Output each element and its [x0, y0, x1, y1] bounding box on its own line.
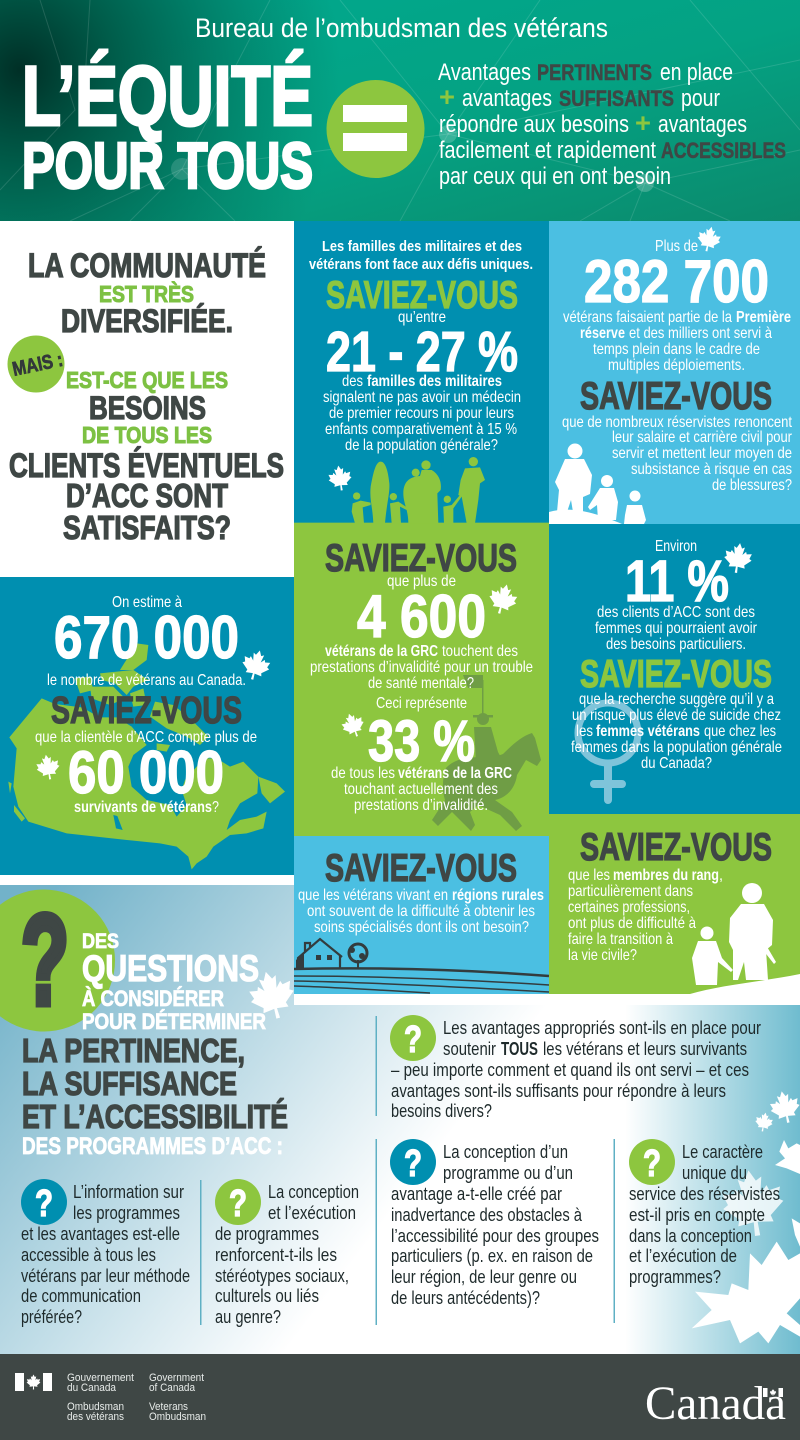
question: reservist service: et l’exécution de	[629, 1246, 737, 1266]
heading: questions to consider: QUESTIONS	[82, 948, 259, 989]
text: no family doctor: de la population générale?	[345, 437, 498, 454]
question: reservist service: unique du	[682, 1163, 747, 1183]
icon: equals sign	[326, 80, 424, 178]
heading: saviez-vous: SAVIEZ-VOUS	[326, 274, 518, 317]
text: estimated veterans: On estime à	[112, 594, 182, 611]
question circle: ?	[21, 889, 69, 1032]
government signature: Ombudsman	[149, 1411, 206, 1423]
text: all RCMP veterans: prestations d’invalidité.	[354, 797, 488, 814]
text: civilian transition: faire la transition à	[568, 931, 673, 948]
text: civilian transition: certaines professions,	[568, 899, 690, 916]
text: specialized care: ont souvent de la difficulté à obtenir les	[307, 903, 535, 920]
text: civilian transition: ont plus de difficulté à	[568, 915, 696, 932]
question: appropriate benefits: avantages sont-ils suffisants pour répondre à leurs	[391, 1081, 726, 1101]
heading: needs question: EST-CE QUE LES	[66, 367, 228, 393]
text: civilian transition: membres du rang	[613, 867, 719, 884]
equity definition: avantages	[462, 85, 552, 112]
text: estimated veterans: 670 000	[54, 604, 239, 671]
question: information: vétérans par leur méthode	[21, 1266, 190, 1286]
text: specialized care: que les vétérans vivant en	[298, 887, 448, 904]
text: primary reserve	[563, 309, 791, 374]
text: estimated veterans: le nombre de vétérans au Canada.	[47, 672, 246, 689]
footer	[0, 1354, 800, 1440]
question: program design barriers: programme ou d’un	[443, 1163, 573, 1183]
heading: needs question	[9, 367, 284, 546]
question: information: de communication	[21, 1286, 141, 1306]
icon: question badge	[390, 1139, 436, 1185]
icon: maple leaf	[722, 541, 754, 575]
heading: relevance sufficiency accessibility: ET L’ACCESSIBILITÉ	[22, 1098, 288, 1135]
icon: maple leaf	[339, 710, 367, 740]
text: no family doctor	[323, 373, 521, 454]
text: suicide risk: femmes vétérans	[596, 723, 700, 740]
text: plus de: Plus de	[655, 238, 698, 255]
text: women clients: des besoins particuliers.	[606, 636, 746, 653]
icon: question badge	[21, 1179, 67, 1225]
family silhouette	[294, 457, 549, 530]
icon: question badge	[215, 1179, 261, 1225]
equity definition: en place	[660, 59, 733, 86]
text: mental health	[310, 643, 533, 712]
text: all RCMP veterans	[331, 765, 512, 814]
government signature: Ombudsman	[67, 1401, 124, 1413]
heading: needs question: BESOINS	[89, 390, 206, 426]
equity definition: par ceux qui en ont besoin	[439, 163, 671, 190]
text: civilian transition: la vie civile?	[568, 947, 637, 964]
question: stereotypes: renforcent-t-ils les	[215, 1245, 337, 1265]
text: women clients: femmes qui pourraient avoir	[595, 620, 758, 637]
equity definition: SUFFISANTS	[559, 86, 674, 111]
heading: questions to consider: POUR DÉTERMINER	[82, 1009, 266, 1034]
question: program design barriers: l’accessibilité pour des groupes	[391, 1226, 599, 1246]
text: reservists give up salary	[562, 414, 793, 494]
text: women clients	[595, 604, 758, 653]
stat: 11 percent: 11 %	[625, 549, 729, 614]
question: program design barriers	[390, 1139, 599, 1308]
text: no family doctor: des	[342, 373, 363, 390]
icon: maple leaf	[35, 753, 61, 781]
heading: community is diverse: LA COMMUNAUTÉ	[28, 247, 266, 285]
panel: non-commissioned members	[549, 814, 800, 994]
question: stereotypes	[215, 1179, 359, 1327]
question: program design barriers: leur région, de leur genre ou	[391, 1267, 577, 1287]
large maple leaves	[692, 1088, 800, 1343]
text: primary reserve: et des milliers ont servi à	[629, 325, 772, 342]
panel: community	[0, 221, 294, 577]
stat: 11 percent: Environ	[655, 538, 697, 555]
equity definition: pour	[681, 85, 720, 112]
icon: question badge: ?	[404, 1019, 422, 1061]
question: program design barriers: de leurs antécédents)?	[391, 1288, 540, 1308]
text: no family doctor: familles des militaires	[367, 373, 502, 390]
question: information: préférée?	[21, 1307, 82, 1327]
subheading: unique challenges: vétérans font face aux défis uniques.	[309, 256, 533, 273]
icon: question badge: ?	[404, 1143, 422, 1185]
question: appropriate benefits: TOUS	[501, 1039, 538, 1059]
text: all RCMP veterans: touchant actuellement des	[344, 781, 498, 798]
icon: question badge	[629, 1139, 675, 1185]
icon: house and tree	[296, 939, 367, 969]
question: stereotypes: La conception	[268, 1182, 359, 1202]
government signature: Gouvernement	[67, 1372, 134, 1384]
icon: maple leaf	[327, 464, 353, 492]
icon: maple leaf	[695, 224, 723, 254]
heading: saviez-vous: SAVIEZ-VOUS	[51, 690, 242, 732]
text: suicide risk: du Canada?	[641, 755, 712, 772]
panel: women veterans	[549, 524, 800, 814]
stat: 33 percent: 33 %	[368, 709, 475, 774]
equity definition: Avantages	[438, 59, 531, 86]
question: stereotypes: stéréotypes sociaux,	[215, 1266, 349, 1286]
stat: 4 600: 4 600	[357, 583, 486, 650]
soldiers silhouette	[549, 444, 646, 524]
heading: community is diverse	[28, 247, 266, 339]
text: primary reserve: réserve	[580, 325, 625, 342]
question: reservist service	[629, 1139, 780, 1287]
heading: questions to consider: À CONSIDÉRER	[82, 986, 224, 1011]
question: program design barriers: avantage a-t-elle créé par	[391, 1184, 562, 1204]
question circle	[0, 889, 115, 1032]
white gap	[0, 875, 294, 885]
text: no family doctor: enfants comparativement à 15 %	[325, 421, 517, 438]
heading: relevance sufficiency accessibility	[22, 1032, 288, 1160]
equity definition: +	[439, 82, 455, 112]
header subtitle: Bureau de l’ombudsman des vétérans	[195, 13, 608, 43]
text: survivors	[35, 729, 257, 816]
question: reservist service: Le caractère	[682, 1142, 763, 1162]
text: survivors: que la clientèle d’ACC compte plus de	[35, 729, 257, 746]
question: reservist service: dans la conception	[629, 1226, 752, 1246]
text: survivors: 60 000	[68, 739, 224, 806]
question: information: les programmes	[73, 1203, 180, 1223]
question: information: accessible à tous les	[21, 1245, 156, 1265]
icon: maple leaf	[486, 581, 520, 617]
question: reservist service: est-il pris en compte	[629, 1205, 765, 1225]
map of Canada	[8, 643, 285, 869]
panel: questions background	[0, 885, 800, 1355]
panel: RCMP veterans	[294, 524, 549, 836]
text: civilian transition	[568, 867, 723, 964]
text: women clients: des clients d’ACC sont des	[597, 604, 755, 621]
RCMP rider silhouette	[432, 675, 541, 831]
soldiers silhouette	[690, 883, 800, 994]
text: civilian transition: particulièrement dans	[568, 883, 693, 900]
government signature: des vétérans	[67, 1411, 124, 1423]
icon: question badge: ?	[643, 1143, 661, 1185]
panel: veterans in Canada	[0, 577, 294, 875]
text: mental health: Ceci représente	[376, 695, 467, 712]
equity definition	[438, 59, 786, 190]
question: appropriate benefits: soutenir	[443, 1039, 496, 1059]
text: specialized care: soins spécialisés dont ils ont besoin?	[314, 919, 529, 936]
government signature: du Canada	[67, 1382, 117, 1394]
heading: saviez-vous: SAVIEZ-VOUS	[325, 847, 517, 890]
icon: question badge	[390, 1015, 436, 1061]
text: survivors: ?	[212, 799, 219, 816]
stat: 282 700: 282 700	[584, 248, 769, 315]
badge: mais	[8, 336, 65, 392]
question: stereotypes: et l’exécution	[268, 1203, 356, 1223]
main title: L’ÉQUITÉ	[22, 49, 313, 143]
badge: mais: MAIS :	[10, 349, 65, 381]
text: suicide risk: que chez les	[704, 723, 776, 740]
stat: 21 to 27 percent: 21 - 27 %	[326, 320, 518, 384]
text: mental health: touchent des	[442, 643, 518, 660]
icon: question badge: ?	[35, 1183, 53, 1225]
text: no family doctor: de premier recours ni pour leurs	[329, 405, 514, 422]
heading: relevance sufficiency accessibility: DES PROGRAMMES D’ACC :	[22, 1133, 283, 1160]
icon: Canadian flag	[15, 1373, 52, 1391]
main title: POUR TOUS	[22, 129, 313, 202]
equity definition: avantages	[658, 111, 747, 138]
heading: needs question: D’ACC SONT	[66, 477, 228, 514]
heading: needs question: CLIENTS ÉVENTUELS	[9, 447, 284, 485]
text: primary reserve: multiples déploiements.	[608, 357, 745, 374]
text: all RCMP veterans: de tous les	[331, 765, 395, 782]
question: information: et les avantages est-elle	[21, 1224, 180, 1244]
text: primary reserve: temps plein dans le cadre de	[593, 341, 760, 358]
panel: rural regions	[294, 836, 549, 994]
heading: relevance sufficiency accessibility: LA PERTINENCE,	[22, 1032, 245, 1069]
text: primary reserve: vétérans faisaient partie de la	[563, 309, 732, 326]
question: appropriate benefits: besoins divers?	[391, 1101, 492, 1121]
question: program design barriers: particuliers (p. ex. en raison de	[391, 1246, 593, 1266]
text: estimated veterans	[47, 594, 246, 689]
icon: female symbol	[578, 703, 638, 800]
stat: 4 600: que plus de	[387, 573, 456, 590]
panel: reservists	[549, 221, 800, 524]
subheading: unique challenges: Les familles des militaires et des	[322, 238, 522, 255]
header banner	[0, 0, 800, 221]
text: suicide risk	[571, 691, 782, 772]
text: civilian transition: que les	[568, 867, 610, 884]
main title	[22, 49, 313, 202]
question: program design barriers: La conception d’un	[443, 1142, 568, 1162]
icon: maple leaf	[244, 966, 300, 1024]
heading: saviez-vous: SAVIEZ-VOUS	[325, 537, 517, 580]
heading: needs question: SATISFAITS?	[63, 509, 231, 546]
government signature: Government	[149, 1372, 204, 1384]
subheading: unique challenges	[309, 238, 533, 273]
heading: questions to consider: DES	[82, 930, 119, 953]
text: specialized care	[298, 887, 544, 936]
text: civilian transition: ,	[719, 867, 723, 884]
text: mental health: de santé mentale?	[368, 675, 474, 692]
question: appropriate benefits: les vétérans et leurs survivants	[543, 1039, 747, 1059]
heading: community is diverse: EST TRÈS	[99, 280, 194, 307]
equity definition: facilement et rapidement	[439, 137, 656, 164]
government signature	[67, 1372, 206, 1423]
Canada wordmark: Canada	[645, 1377, 786, 1430]
icon: question badge: ?	[229, 1183, 247, 1225]
text: all RCMP veterans: vétérans de la GRC	[398, 765, 512, 782]
text: suicide risk: les	[576, 723, 593, 740]
question: appropriate benefits	[390, 1015, 761, 1121]
heading: needs question: DE TOUS LES	[82, 422, 212, 448]
question: program design barriers: inadvertance des obstacles à	[391, 1205, 583, 1225]
question: stereotypes: de programmes	[215, 1224, 319, 1244]
question: information	[21, 1179, 190, 1327]
question: information: L’information sur	[73, 1182, 184, 1202]
heading: relevance sufficiency accessibility: LA SUFFISANCE	[22, 1065, 237, 1102]
equity definition: répondre aux besoins	[439, 111, 629, 138]
text: no family doctor: signalent ne pas avoir un médecin	[323, 389, 521, 406]
question: stereotypes: au genre?	[215, 1307, 281, 1327]
stat: 21 to 27 percent: qu’entre	[398, 309, 446, 326]
equity definition: PERTINENTS	[537, 60, 652, 85]
question: stereotypes: culturels ou liés	[215, 1286, 319, 1306]
icon: maple leaf	[239, 647, 273, 683]
panel: military families	[294, 221, 549, 530]
text: mental health: prestations d’invalidité pour un trouble	[310, 659, 533, 676]
government signature: Veterans	[149, 1401, 188, 1413]
farm fields	[294, 968, 549, 993]
heading: community is diverse: DIVERSIFIÉE.	[61, 303, 233, 339]
heading: questions to consider	[82, 930, 266, 1034]
equity definition: +	[635, 108, 651, 138]
stat: 21 to 27 percent	[326, 309, 518, 384]
question: reservist service: programmes?	[629, 1267, 721, 1287]
text: specialized care: régions rurales	[452, 887, 544, 904]
text: survivors: survivants de vétérans	[74, 799, 212, 816]
government signature: of Canada	[149, 1382, 196, 1394]
text: mental health: vétérans de la GRC	[325, 643, 438, 660]
